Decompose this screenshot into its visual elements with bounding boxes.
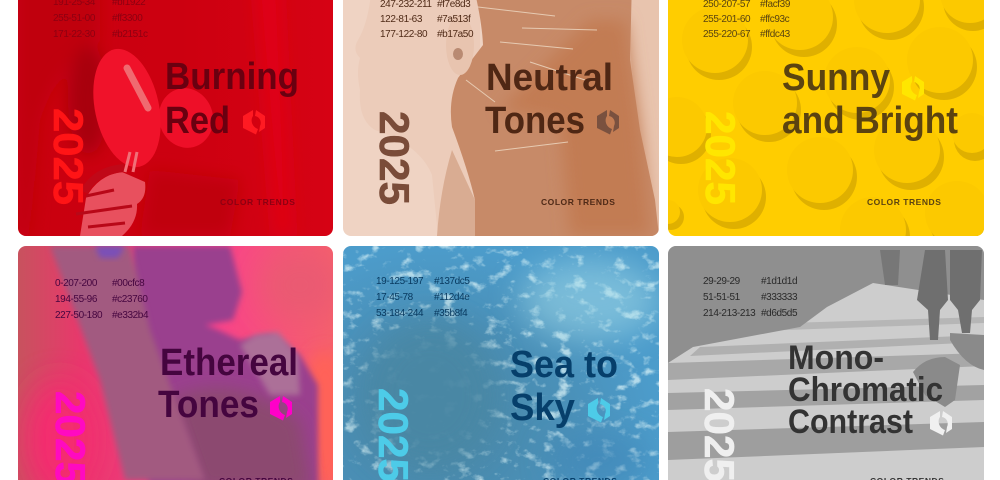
- panel: Sunny and Bright: [668, 0, 984, 236]
- flower: [160, 88, 213, 148]
- palette values: #e332b4: [112, 310, 149, 321]
- palette values: 214-213-213: [703, 308, 756, 319]
- year: 2025: [371, 111, 418, 205]
- palette values: 255-51-00: [53, 13, 96, 24]
- face: [355, 0, 480, 236]
- icon: logo: [597, 110, 619, 134]
- palette values: 227-50-180: [55, 310, 103, 321]
- year: 2025: [696, 388, 743, 480]
- palette values: 0-207-200: [55, 278, 98, 289]
- panel: Burning Red: [18, 0, 333, 236]
- label: COLOR TRENDS: [867, 197, 942, 207]
- title: [788, 339, 943, 441]
- raised arm: [50, 246, 205, 480]
- palette values: #112d4e: [434, 292, 470, 303]
- title: [510, 344, 618, 429]
- panel: Mono-Chromatic Contrast: [668, 246, 984, 480]
- title: Ethereal: [160, 342, 298, 384]
- palette values: #ff3300: [112, 13, 143, 24]
- palette values: 51-51-51: [703, 292, 741, 303]
- photo: crosswalk with pedestrians: [668, 246, 984, 480]
- palette values: #137dc5: [434, 276, 470, 287]
- title: Red: [165, 100, 230, 142]
- palette values: #ffdc43: [760, 29, 791, 40]
- palette values: 53-184-244: [376, 308, 424, 319]
- label: COLOR TRENDS: [541, 197, 616, 207]
- icon: logo: [930, 411, 952, 436]
- palette values: [703, 276, 798, 319]
- palette values: #c23760: [112, 294, 148, 305]
- title: Burning: [165, 56, 299, 98]
- photo: red drape, anthurium and hand: [18, 0, 333, 236]
- palette values: 122-81-63: [380, 14, 423, 25]
- title: Tones: [158, 384, 259, 426]
- palette values: [703, 0, 791, 40]
- palette values: #b2151c: [112, 29, 148, 40]
- title: and Bright: [782, 100, 958, 142]
- panel: Sea to Sky: [343, 246, 660, 480]
- palette values: 255-201-60: [703, 14, 751, 25]
- photo: profile with red hair and pins: [343, 0, 659, 236]
- title: Tones: [485, 100, 585, 142]
- year: 2025: [370, 388, 417, 480]
- stem: [125, 152, 137, 172]
- pedestrians: [880, 250, 982, 340]
- palette values: #ffc93c: [760, 14, 790, 25]
- upper shadowed pavement: [668, 246, 984, 363]
- title: Chromatic: [788, 371, 943, 409]
- palette values: #b17a50: [437, 29, 474, 40]
- palette values: [376, 276, 470, 319]
- hair: [451, 0, 659, 236]
- title: [485, 57, 613, 142]
- photo: figure in magenta light: [18, 246, 350, 480]
- palette values: 194-55-96: [55, 294, 98, 305]
- title: Sea to: [510, 344, 618, 386]
- panel: Neutral Tones: [343, 0, 659, 236]
- year: 2025: [697, 111, 744, 205]
- panel: Ethereal Tones: [18, 246, 350, 480]
- palette values: [380, 0, 474, 40]
- icon: logo: [588, 398, 610, 422]
- title: Sky: [510, 387, 575, 429]
- palette values: 171-22-30: [53, 29, 96, 40]
- icon: logo: [243, 110, 265, 134]
- palette values: 29-29-29: [703, 276, 741, 287]
- pins: [466, 7, 597, 151]
- palette values: 19-125-197: [376, 276, 424, 287]
- palette values: #7a513f: [437, 14, 471, 25]
- figure: [130, 246, 318, 480]
- title: [782, 57, 958, 142]
- title: [165, 56, 299, 142]
- crosswalk stripes: [668, 353, 984, 380]
- palette values: #333333: [761, 292, 798, 303]
- palette values: #1d1d1d: [761, 276, 797, 287]
- palette values: 177-122-80: [380, 29, 428, 40]
- year: 2025: [45, 108, 92, 205]
- palette values: [53, 0, 148, 40]
- palette values: 17-45-78: [376, 292, 414, 303]
- palette values: #00cfc8: [112, 278, 145, 289]
- cast shadows: [913, 333, 984, 407]
- palette values: [55, 278, 149, 321]
- photo: dappled blue water: [343, 246, 660, 480]
- photo: scattered lemons: [668, 0, 984, 236]
- title: [158, 342, 298, 426]
- label: COLOR TRENDS: [220, 197, 296, 207]
- title: Contrast: [788, 403, 913, 441]
- palette values: #d6d5d5: [761, 308, 798, 319]
- hand: [80, 172, 145, 236]
- title: Mono-: [788, 339, 884, 377]
- palette values: 255-220-67: [703, 29, 751, 40]
- palette values: #35b8f4: [434, 308, 468, 319]
- title: Neutral: [486, 57, 613, 99]
- icon: logo: [902, 76, 924, 100]
- title: Sunny: [782, 57, 890, 99]
- icon: logo: [270, 396, 292, 420]
